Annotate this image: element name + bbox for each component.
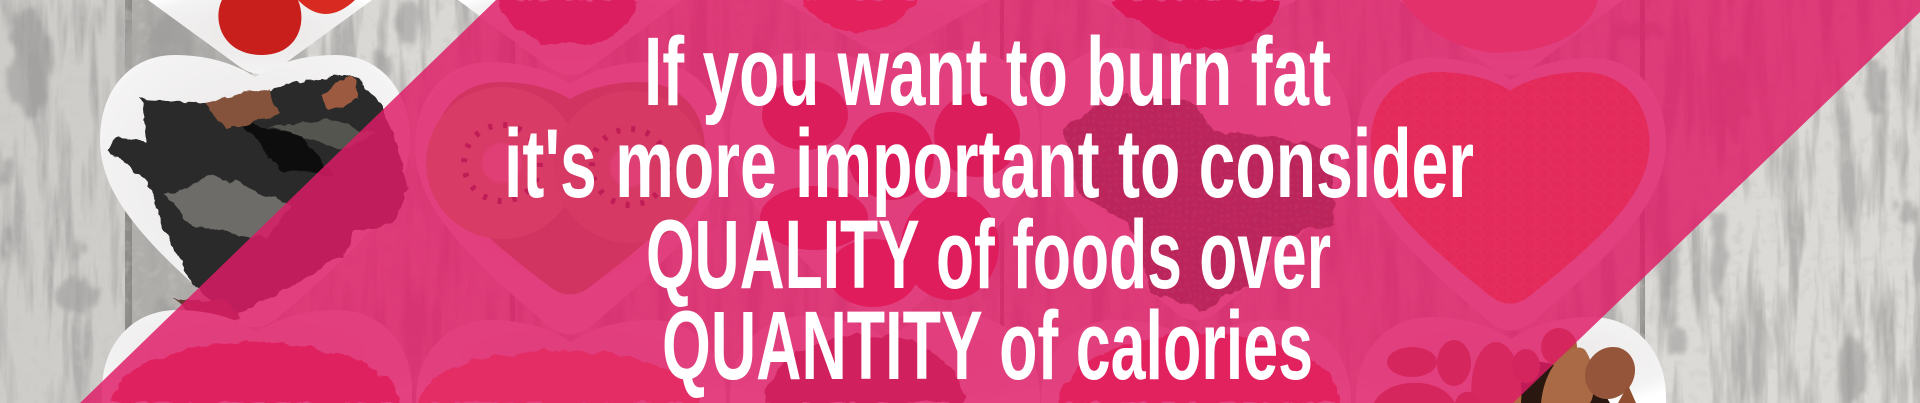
column 3 bowls: [730, 0, 1040, 403]
column 5 bowls: [1356, 0, 1666, 403]
headline line 2: it's more important to consider: [504, 109, 1474, 218]
bowl top: [1097, 0, 1297, 50]
bowl with strawberries: [730, 50, 1040, 322]
bowl with seaweed: [100, 55, 410, 328]
column 4 bowls: [1041, 0, 1351, 403]
bowl bottom: [1041, 320, 1351, 403]
column 2 bowls: [415, 0, 726, 403]
bowl with broccoli: [1041, 48, 1351, 320]
headline text: [504, 17, 1474, 400]
headline line 3: QUALITY of foods over: [646, 200, 1331, 309]
bowl top: [1399, 0, 1623, 75]
headline line 1: If you want to burn fat: [644, 17, 1331, 126]
bowl top: [782, 0, 990, 54]
bowl with red lentils: [1356, 58, 1666, 330]
bowl with tomatoes: [148, 0, 372, 74]
bowl with almonds: [1356, 317, 1666, 403]
bowl with kiwi: [415, 62, 725, 334]
headline line 4: QUANTITY of calories: [662, 291, 1313, 400]
bowl with red food: [102, 310, 412, 403]
column 1 bowls: [100, 0, 412, 403]
bowl bottom: [416, 320, 726, 403]
bowl top: [458, 0, 682, 75]
bowl bottom: [730, 316, 1040, 403]
